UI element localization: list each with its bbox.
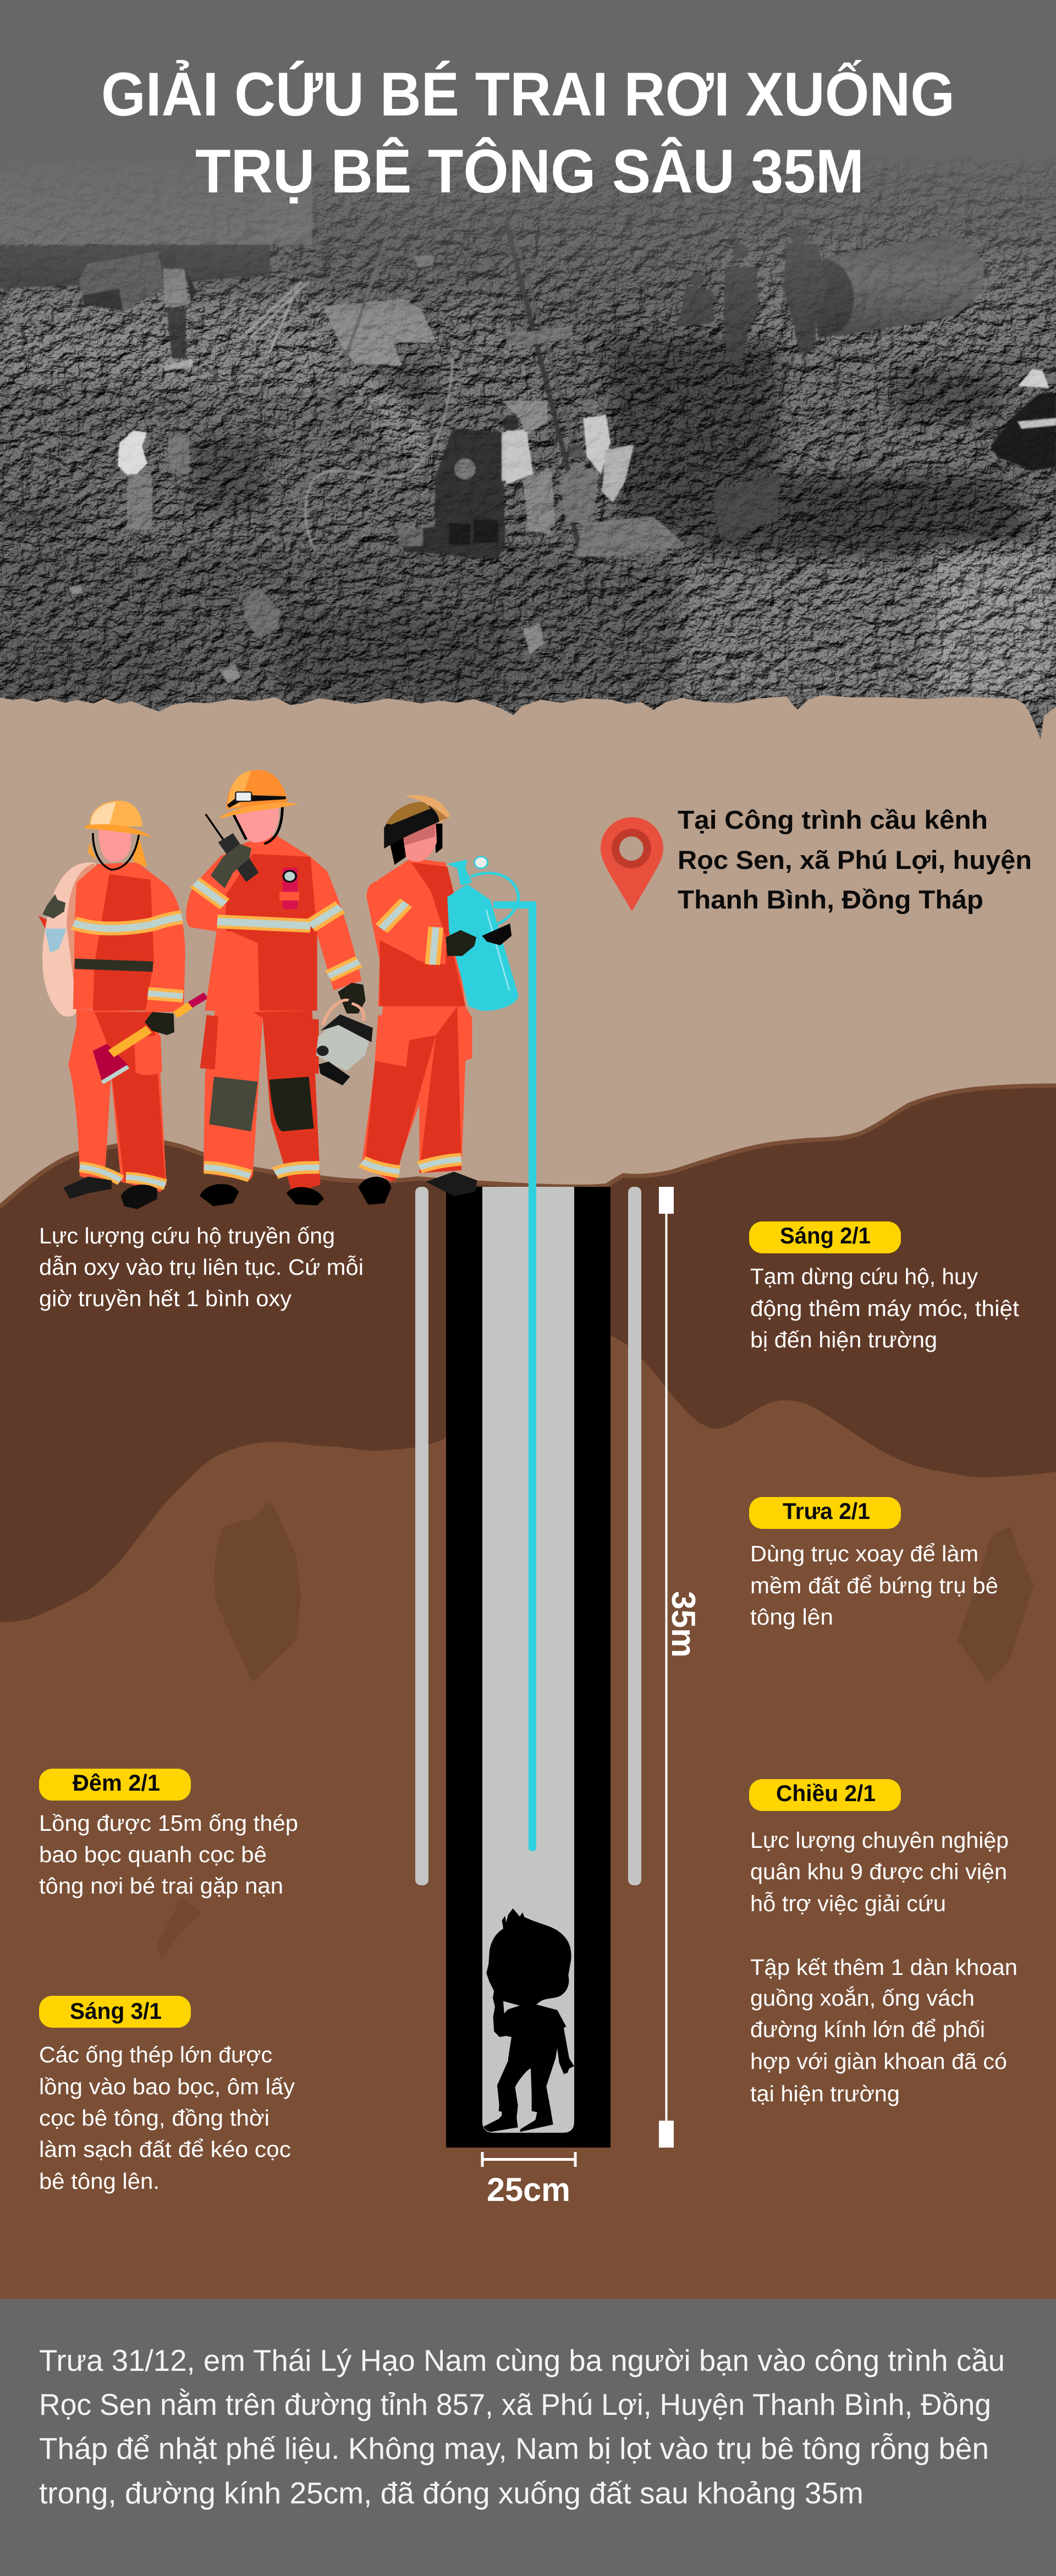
firefighter center [186,770,373,1206]
timeline: Đêm 2/1: tông nơi bé trai gặp nạn [39,1873,283,1898]
gas cylinder pipe [506,332,573,338]
timeline: Sáng 3/1: Sáng 3/1 [70,1998,162,2024]
depth ruler 35m: 35m [665,1591,702,1658]
drilling rig [398,400,550,558]
left note: oxygen: giờ truyền hết 1 bình oxy [39,1286,292,1311]
photo fog [0,132,1056,335]
location text [678,805,1032,914]
timeline: Sáng 2/1: Sáng 2/1 [780,1223,871,1248]
location text: Tại Công trình cầu kênh [678,805,988,834]
timeline: Chiều 2/1: Lực lượng chuyên nghiệp [750,1828,1009,1853]
photo grain over objects [0,137,1056,731]
rock: left [214,1501,301,1682]
timeline: Sáng 2/1 [749,1221,1020,1352]
timeline: Sáng 2/1: bị đến hiện trường [750,1327,937,1352]
photo panel: rescue site [0,132,1056,731]
summary text block [39,2343,1005,2510]
timeline: Chiều 2/1: hợp với giàn khoan đã có [750,2049,1007,2074]
timeline: Sáng 3/1: cọc bê tông, đồng thời [39,2105,270,2131]
location pin icon [601,817,663,911]
summary text block: Rọc Sen nằm trên đường tỉnh 857, xã Phú Lợi, Huyện Thanh Bình, Đồng [39,2387,991,2421]
left note: oxygen [39,1223,364,1311]
width measure 25cm: 25cm [487,2171,570,2208]
title [101,60,955,206]
soil texture relief [0,137,1056,731]
timeline: Chiều 2/1: đường kính lớn để phối [750,2017,985,2042]
title: TRỤ BÊ TÔNG SÂU 35M [195,137,864,206]
soil layer: lighter brown [0,1320,1056,2310]
timeline: Trưa 2/1 [749,1497,998,1630]
steel pipes [246,281,309,351]
hose [305,359,453,552]
rock: small left [156,1897,202,1959]
location text: Rọc Sen, xã Phú Lợi, huyện [678,845,1032,874]
timeline: Sáng 3/1: Các ống thép lớn được [39,2042,272,2067]
tarp [323,299,437,366]
left note: oxygen: Lực lượng cứu hộ truyền ống [39,1223,335,1248]
timeline: Đêm 2/1 [39,1769,298,1898]
location text: Thanh Bình, Đồng Tháp [678,885,983,914]
soil layer: dark brown hill [0,1086,1056,1650]
timeline: Chiều 2/1: hỗ trợ việc giải cứu [750,1891,946,1916]
timeline: Đêm 2/1: Đêm 2/1 [73,1770,160,1796]
crouching firefighter [990,369,1056,471]
timeline: Đêm 2/1: bao bọc quanh cọc bê [39,1842,267,1867]
timeline: Sáng 3/1 [39,1996,295,2194]
timeline: Sáng 3/1: làm sạch đất để kéo cọc [39,2137,291,2162]
concrete pile shaft [446,1187,610,2148]
timeline: Chiều 2/1: Tập kết thêm 1 dàn khoan [750,1955,1018,1980]
firefighters group [38,770,519,1209]
workers and sack [506,398,685,557]
left note: oxygen: dẫn oxy vào trụ liên tục. Cứ mỗi [39,1254,364,1280]
timeline: Trưa 2/1: mềm đất để bứng trụ bê [750,1573,998,1598]
white bag and post [118,431,190,530]
bamboo pole [286,229,389,552]
drill mast [506,222,581,558]
summary text block: Tháp để nhặt phế liệu. Không may, Nam bị lọt vào trụ bê tông rỗng bên [39,2431,989,2465]
oxygen tube [493,901,536,1851]
rock: right [958,1526,1034,1682]
timeline: Sáng 2/1: Tạm dừng cứu hộ, huy [750,1264,978,1289]
steel tank [815,235,984,337]
timeline: Trưa 2/1: Dùng trục xoay để làm [750,1541,978,1566]
summary text block: Trưa 31/12, em Thái Lý Hạo Nam cùng ba người bạn vào công trình cầu [39,2343,1005,2377]
boy silhouette [483,1908,574,2132]
stones [68,255,544,683]
timeline: Chiều 2/1: Chiều 2/1 [776,1780,876,1806]
firefighter right [358,795,519,1205]
summary text block: trong, đường kính 25cm, đã đóng xuống đất sau khoảng 35m [39,2476,864,2510]
timeline: Chiều 2/1: tại hiện trường [750,2081,900,2106]
width measure 25cm [482,2152,575,2208]
left guide rail [415,1187,428,1885]
title: GIẢI CỨU BÉ TRAI RƠI XUỐNG [101,60,955,129]
depth ruler 35m [659,1187,702,2148]
timeline: Đêm 2/1: Lồng được 15m ống thép [39,1810,298,1836]
boulder [242,588,280,637]
firefighter left [38,801,206,1209]
timeline: Sáng 3/1: lồng vào bao bọc, ôm lấy [39,2074,295,2099]
tan background with torn edge [0,695,1056,1265]
bottom panel background [0,2299,1056,2576]
right guide rail [628,1187,641,1885]
timeline: Trưa 2/1: tông lên [750,1604,833,1630]
drilling machine [0,145,312,311]
pit wall column [713,474,780,539]
timeline: Trưa 2/1: Trưa 2/1 [783,1498,870,1524]
timeline: Sáng 2/1: động thêm máy móc, thiệt [750,1296,1020,1321]
timeline: Chiều 2/1 [749,1779,1018,2106]
onlookers [678,227,827,367]
standing man [160,250,196,371]
timeline: Chiều 2/1: guồng xoắn, ống vách [750,1985,975,2011]
timeline: Chiều 2/1: quân khu 9 được chi viện [750,1859,1007,1884]
timeline: Sáng 3/1: bê tông lên. [39,2168,160,2194]
